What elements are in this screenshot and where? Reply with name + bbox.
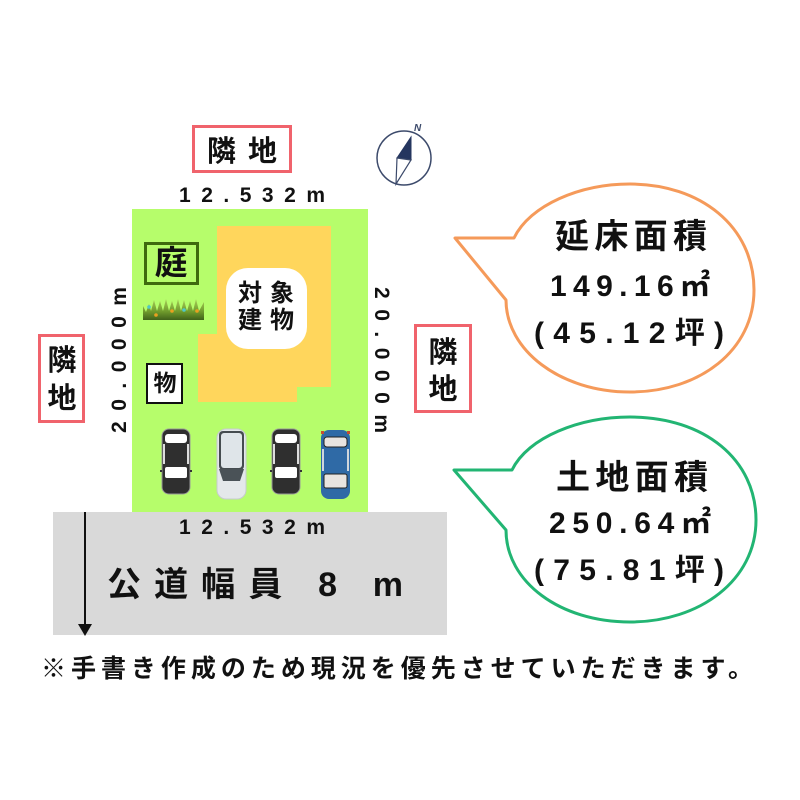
panel: site plot bbox=[132, 209, 368, 512]
arrow: road width bbox=[78, 512, 92, 636]
icon: north compass bbox=[377, 123, 431, 185]
panel: public road bbox=[53, 512, 447, 635]
callout: floor area: 延床面積 bbox=[555, 218, 707, 256]
car: white bbox=[217, 429, 246, 499]
icon: grass bbox=[143, 299, 204, 320]
callout: land area: 250.64㎡ bbox=[549, 507, 711, 540]
label: top neighbor bbox=[194, 126, 290, 172]
dimension: left depth: 20.000m bbox=[108, 287, 131, 433]
callout: land area: (75.81坪) bbox=[534, 554, 724, 587]
car: blue bbox=[321, 430, 350, 499]
note: ※手書き作成のため現況を優先させていただきます。 bbox=[41, 655, 753, 683]
label: storage shed bbox=[147, 364, 182, 403]
road label: 公道幅員 8 m bbox=[107, 566, 403, 604]
dimension: right depth: 20.000m bbox=[370, 287, 393, 433]
target building label bbox=[226, 268, 307, 349]
callout: floor area bbox=[455, 184, 754, 392]
callout: floor area: (45.12坪) bbox=[534, 317, 724, 350]
callout: floor area: 149.16㎡ bbox=[550, 270, 710, 303]
label: left neighbor: 隣 bbox=[47, 344, 77, 377]
dimension: bottom width: 12.532m bbox=[179, 516, 325, 539]
target building label: 対象 bbox=[238, 280, 294, 307]
label: storage shed: 物 bbox=[154, 370, 176, 396]
label: garden: 庭 bbox=[154, 244, 188, 281]
label: right neighbor bbox=[416, 326, 470, 412]
target building label: 建物 bbox=[238, 307, 294, 334]
car: black 1 bbox=[160, 429, 192, 494]
label: top neighbor: 隣地 bbox=[207, 135, 277, 168]
label: garden bbox=[146, 244, 198, 284]
callout: land area: 土地面積 bbox=[556, 459, 708, 497]
label: right neighbor: 地 bbox=[428, 373, 458, 406]
label: left neighbor: 地 bbox=[47, 382, 77, 415]
building footprint bbox=[198, 226, 331, 402]
label: right neighbor: 隣 bbox=[428, 336, 458, 369]
car: black 2 bbox=[270, 429, 302, 494]
dimension: top width: 12.532m bbox=[179, 184, 325, 207]
icon: north compass: N bbox=[414, 123, 422, 134]
label: left neighbor bbox=[40, 336, 84, 422]
callout: land area bbox=[454, 417, 756, 622]
